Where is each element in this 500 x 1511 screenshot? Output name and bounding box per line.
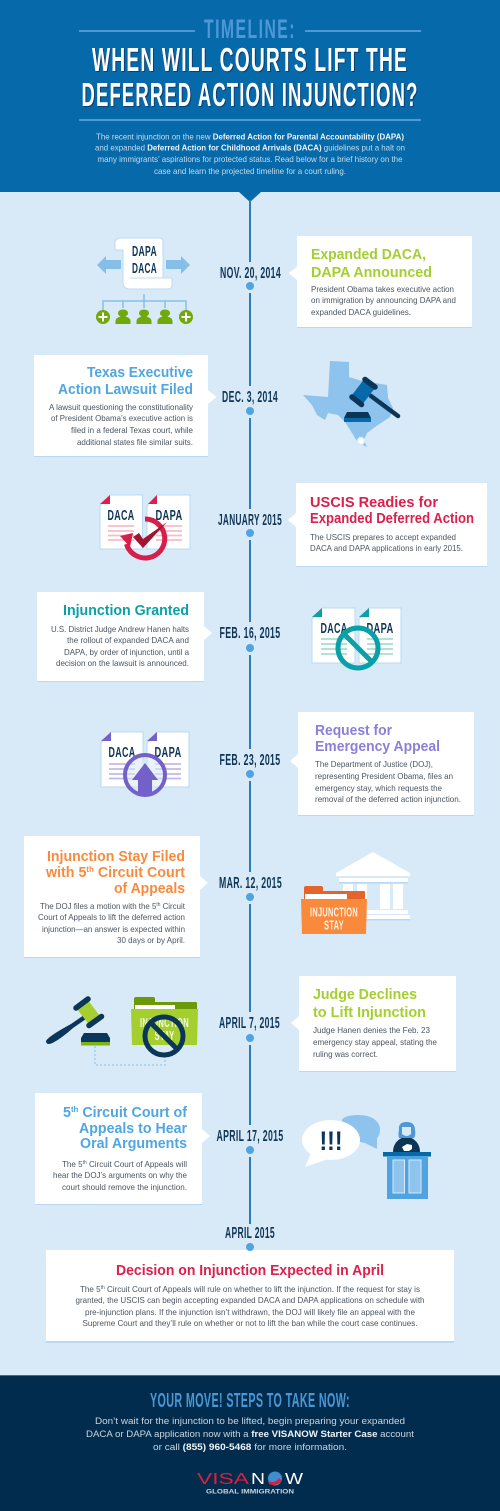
decision card (46, 1250, 454, 1343)
icon: documents with prohibition sign: DAPA (366, 621, 394, 637)
card: emergency stay, which requests the (315, 784, 442, 793)
intro text: many immigrants’ aspirations for protected status. Read below for a brief history on the (98, 155, 403, 164)
card: 30 days or by April. (117, 936, 185, 945)
card: Action Lawsuit Filed (58, 382, 193, 398)
icon: documents with check: DACA (108, 508, 135, 524)
icon: courthouse and injunction stay folder: INJUNCTION (310, 904, 358, 920)
intro text: and expanded Deferred Action for Childhood Arrivals (DACA) guidelines put a halt on (95, 144, 405, 152)
card: th (86, 865, 94, 874)
timeline dot (246, 770, 254, 778)
icon: gavel and denied folder: INJUNCTION (140, 1015, 189, 1030)
card: Circuit (160, 902, 186, 911)
icon: gavel and denied folder: STAY (154, 1028, 174, 1043)
timeline axis (249, 200, 251, 1224)
footer text (86, 1416, 414, 1452)
card: DAPA Announced (311, 265, 432, 281)
intro text: The recent injunction on the new Deferred Action for Parental Accountability (DAPA) (96, 132, 404, 142)
icon: documents with check (100, 495, 190, 558)
date label: FEB. 23, 2015 (220, 752, 280, 769)
card: President Obama takes executive action (311, 285, 454, 294)
card: Judge Declines (313, 987, 417, 1003)
timeline dot (246, 893, 254, 901)
icon: documents with prohibition sign (312, 608, 401, 668)
card: of President Obama’s executive action is (51, 414, 193, 423)
card: The 5 (62, 1160, 83, 1169)
icon: documents with prohibition sign: DACA (320, 621, 348, 637)
logo: VisaNow (197, 1471, 303, 1496)
card: Expanded Deferred Action (310, 511, 474, 527)
card: U.S. District Judge Andrew Hanen halts (51, 625, 189, 634)
card (37, 592, 212, 682)
decision card: th (101, 1285, 105, 1291)
logo: VisaNow: GLOBAL IMMIGRATION (206, 1488, 294, 1496)
icon: DAPA DACA scroll with people (96, 238, 193, 324)
date label: FEB. 16, 2015 (220, 625, 280, 642)
timeline entry: Feb. 16, 2015 (37, 592, 401, 682)
card (291, 976, 456, 1072)
decision card: Decision on Injunction Expected in April (116, 1263, 384, 1279)
date label: APRIL 7, 2015 (219, 1015, 280, 1032)
card: Court of Appeals to lift the deferred action (38, 913, 185, 922)
date label: APRIL 17, 2015 (216, 1128, 284, 1145)
date label: APRIL 2015 (225, 1225, 275, 1242)
timeline entry: April 7, 2015 (46, 976, 456, 1072)
timeline entry: Mar. 12, 2015 (24, 836, 410, 958)
icon: DAPA DACA scroll with people: DACA (132, 261, 157, 277)
card: Judge Hanen denies the Feb. 23 (313, 1026, 430, 1035)
footer text: or call (855) 960-5468 for more information. (153, 1442, 347, 1452)
timeline entry: January 2015 (100, 483, 487, 567)
footer panel (0, 1375, 500, 1511)
timeline entry: Dec. 3, 2014 (34, 355, 398, 457)
card: expanded DACA guidelines. (311, 308, 411, 317)
decision card: granted, the USCIS can begin accepting expanded DACA and DAPA applications on schedule with (76, 1296, 425, 1305)
icon: documents with up arrow: DAPA (154, 745, 182, 761)
card: Injunction Stay Filed (47, 849, 185, 865)
decision card: The 5 (80, 1285, 101, 1294)
card: emergency stay appeal, stating the (313, 1038, 437, 1047)
footer text: Don’t wait for the injunction to be lifted, begin preparing your expanded (95, 1416, 405, 1426)
timeline dot (246, 644, 254, 652)
icon: courthouse and injunction stay folder: STAY (324, 918, 344, 932)
timeline dot (246, 407, 254, 415)
card: Appeals to Hear (79, 1121, 187, 1137)
header panel (0, 0, 500, 202)
decision card: pre-injunction plans. If the injunction isn’t withdrawn, the DOJ will likely file an appeal with the (85, 1308, 415, 1317)
timeline dot (246, 529, 254, 537)
card: Circuit Court (94, 865, 185, 881)
card (288, 483, 487, 567)
card: The USCIS prepares to accept expanded (310, 533, 456, 542)
timeline eyebrow: TIMELINE: (204, 14, 296, 44)
logo: VisaNow: N (251, 1471, 265, 1488)
icon: documents with check: DAPA (156, 508, 183, 524)
date label: DEC. 3, 2014 (222, 389, 278, 406)
icon: courthouse and injunction stay folder (301, 852, 410, 934)
card: Oral Arguments (80, 1136, 187, 1152)
icon: Texas map with gavel (303, 361, 398, 447)
card: removal of the deferred action injunction. (315, 795, 461, 804)
icon: speech bubbles and judge: !!! (320, 1126, 342, 1156)
icon: gavel and denied folder (46, 997, 198, 1065)
timeline entry: Nov. 20, 2014 (96, 236, 472, 328)
card: USCIS Readies for (310, 495, 438, 511)
card: on immigration by announcing DAPA and (311, 296, 456, 305)
card: of Appeals (114, 881, 185, 897)
card (288, 236, 472, 328)
logo: VisaNow: VISA (197, 1471, 250, 1488)
card (290, 712, 474, 816)
card (35, 1093, 210, 1205)
timeline entry: April 2015 decision (46, 1225, 454, 1343)
timeline dot (246, 1243, 254, 1251)
title (82, 41, 420, 114)
card: Emergency Appeal (315, 739, 440, 755)
intro text (95, 132, 405, 176)
decision card: Circuit Court of Appeals will rule on whether to lift the injunction. If the request for stay is (105, 1285, 420, 1294)
card: The Department of Justice (DOJ), (315, 760, 433, 769)
icon: documents with up arrow (101, 732, 189, 795)
card: DACA and DAPA applications in early 2015. (310, 544, 463, 553)
decision card: Supreme Court and they’ll rule on whether or not to lift the ban while the court case continues. (82, 1319, 418, 1328)
timeline dot (246, 1146, 254, 1154)
card: decision on the lawsuit is announced. (56, 659, 189, 668)
timeline entry: Feb. 23, 2015 (101, 712, 474, 816)
card (24, 836, 208, 958)
card: injunction—an answer is expected within (42, 925, 185, 934)
card: DAPA, by order of injunction, until a (64, 648, 189, 657)
card: The DOJ files a motion with the 5 (40, 902, 161, 911)
card (34, 355, 216, 457)
card: Circuit Court of Appeals will (87, 1160, 187, 1169)
date label: JANUARY 2015 (218, 512, 282, 529)
icon: speech bubbles and judge (302, 1115, 431, 1199)
card: to Lift Injunction (313, 1005, 426, 1021)
card: representing President Obama, files an (315, 772, 453, 781)
icon: documents with up arrow: DACA (108, 745, 136, 761)
card: ruling was correct. (313, 1050, 378, 1059)
card: A lawsuit questioning the constitutionality (49, 403, 194, 412)
timeline dot (246, 1034, 254, 1042)
card: with 5 (46, 865, 87, 881)
date label: MAR. 12, 2015 (219, 875, 282, 892)
card: th (83, 1160, 87, 1166)
logo: VisaNow: W (285, 1471, 303, 1488)
footer text: DACA or DAPA application now with a free VISANOW Starter Case account (86, 1429, 414, 1439)
card: Texas Executive (87, 365, 193, 381)
card: hear the DOJ’s arguments on why the (53, 1171, 187, 1180)
timeline entry: April 17, 2015 (35, 1093, 431, 1205)
card: Injunction Granted (63, 603, 189, 619)
date label: NOV. 20, 2014 (220, 265, 281, 282)
icon: DAPA DACA scroll with people: DAPA (132, 244, 157, 260)
card: additional states file similar suits. (77, 438, 193, 447)
timeline dot (246, 282, 254, 290)
card: court should remove the injunction. (62, 1183, 187, 1192)
card: Circuit Court of (78, 1105, 187, 1121)
card: Expanded DACA, (311, 247, 426, 263)
card: Request for (315, 723, 392, 739)
card: th (71, 1105, 78, 1114)
card: the rollout of expanded DACA and (67, 636, 189, 645)
card: th (156, 902, 161, 908)
intro text: case and learn the projected timeline for a court ruling. (154, 167, 346, 176)
card: filed in a federal Texas court, while (71, 426, 193, 435)
card: 5 (63, 1105, 71, 1121)
